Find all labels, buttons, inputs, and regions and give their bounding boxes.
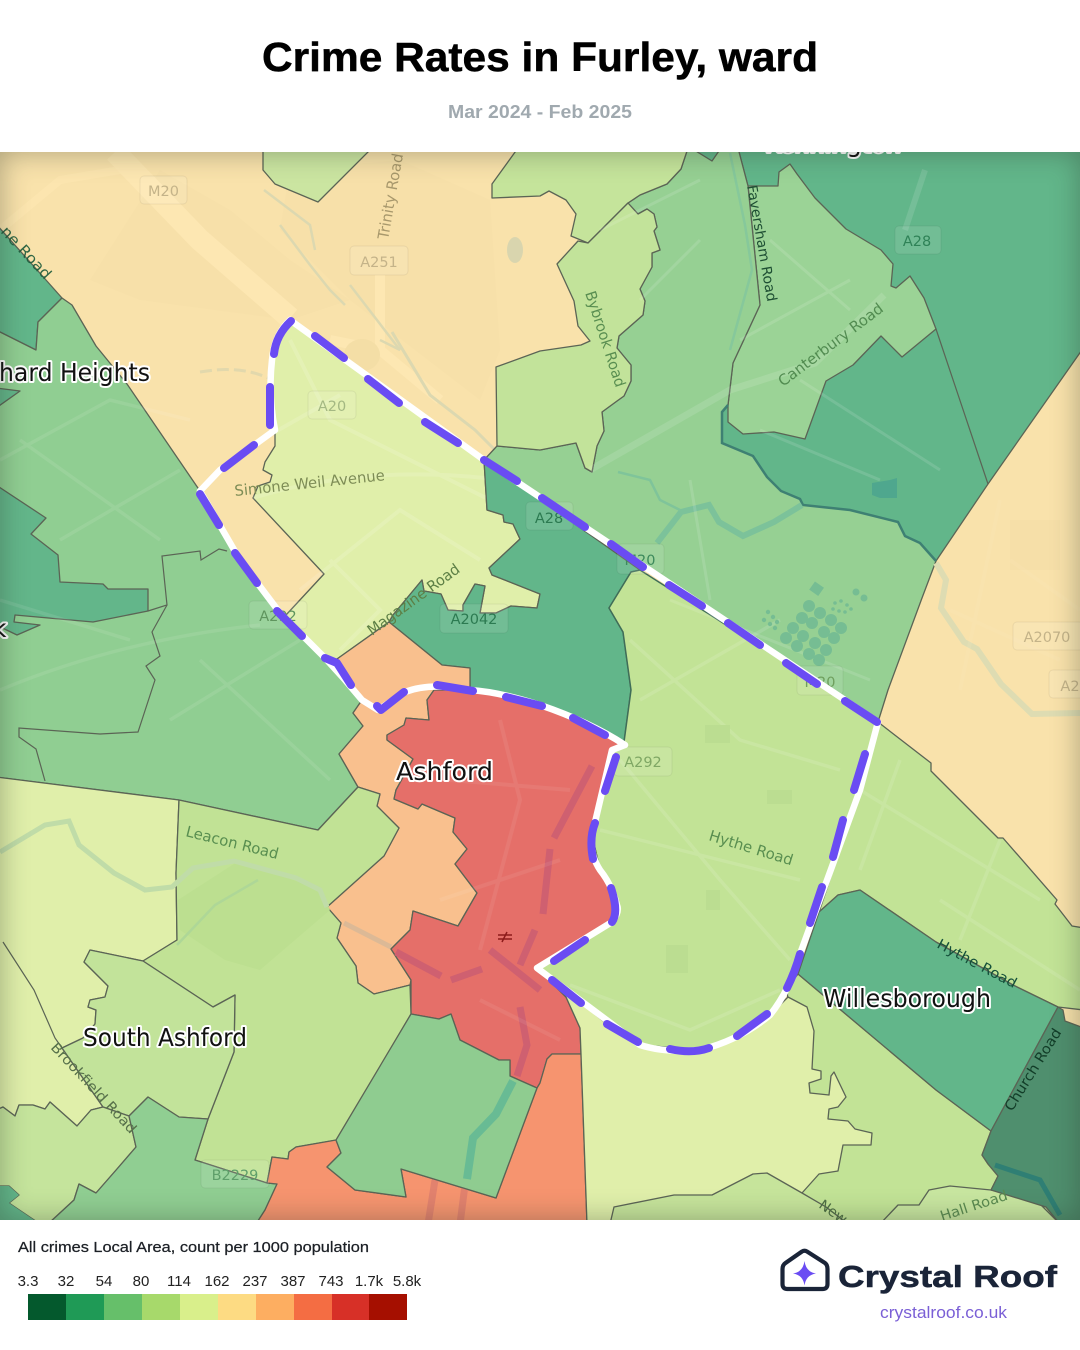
region: peach area	[327, 622, 477, 994]
legend scale values	[18, 1273, 422, 1290]
south-west boundary line	[3, 942, 62, 1048]
region: south-east light yellow	[537, 968, 872, 1224]
region: Leacon park darker patch	[326, 906, 330, 910]
place labels: South Ashford	[83, 1023, 247, 1052]
region: Bybrook lime	[496, 203, 660, 472]
road name labels: Hythe Road	[934, 936, 1019, 992]
road shield labels: B2229	[212, 1168, 258, 1184]
brand name: Crystal Roof	[838, 1259, 1058, 1294]
region: ward light yellow-green area	[253, 320, 540, 659]
region: south-east lime	[760, 974, 1060, 1224]
region: top right dark green	[722, 148, 1080, 561]
river in green south area	[467, 1081, 513, 1179]
region: green south of town	[327, 1014, 537, 1198]
region: bottom lime strip	[610, 1173, 848, 1224]
legend scale values: 32	[58, 1273, 74, 1290]
website: crystalroof.co.uk	[880, 1304, 1008, 1322]
region: town centre red	[387, 690, 625, 1088]
region: central north mid green	[484, 148, 936, 722]
legend scale values: 387	[280, 1273, 306, 1290]
road name labels: Leacon Road	[184, 822, 281, 863]
legend scale values: 237	[242, 1273, 268, 1290]
region: south-west light yellow	[0, 777, 179, 1126]
road shield labels: A2042	[451, 612, 497, 628]
region: east lime	[819, 722, 1080, 1010]
road shield labels: A292	[259, 609, 297, 625]
road shield labels: A251	[360, 255, 398, 271]
region: Leacon Road lime	[143, 787, 411, 1183]
road shields	[140, 176, 1080, 1188]
legend scale values: 80	[133, 1273, 149, 1290]
subtitle: date range: Mar 2024 - Feb 2025	[448, 101, 632, 122]
red area darker railway strips	[396, 766, 592, 1076]
road shield labels: M20	[625, 553, 655, 569]
rivers	[0, 153, 1080, 947]
region: bottom-left teal corner	[0, 1186, 34, 1220]
solar farm circles	[762, 581, 868, 666]
road name labels: Magazine Road	[364, 560, 463, 639]
east lime roads	[860, 760, 1080, 990]
road name labels: Brookfield Road	[47, 1040, 139, 1137]
region: west mid green	[0, 298, 363, 830]
base: tan area	[0, 152, 1080, 1026]
region: south-east dark green	[982, 1007, 1080, 1224]
legend	[18, 1239, 422, 1320]
road shield labels: M20	[148, 184, 179, 200]
road name labels: New	[816, 1197, 850, 1228]
region: top pocket lime	[263, 148, 372, 202]
place labels: Kennington	[765, 129, 901, 158]
road name labels: Hall Road	[938, 1188, 1010, 1225]
road name labels: Canterbury Road	[775, 299, 887, 390]
legend scale values: 3.3	[18, 1273, 38, 1290]
south-east river	[995, 1165, 1060, 1215]
tan area texture and motorway band	[200, 189, 523, 450]
pond	[872, 478, 897, 498]
icon: house logo	[782, 1251, 828, 1289]
road shield labels: A2070	[1024, 630, 1070, 646]
region: small west dark patch	[0, 388, 20, 408]
legend scale values: 743	[318, 1273, 344, 1290]
road name labels: Bybrook Road	[581, 289, 629, 389]
ward light-area roads	[253, 340, 490, 650]
place labels: Ashford	[396, 757, 493, 786]
road shield labels: A28	[903, 234, 931, 250]
boundary line in the dark green area	[936, 329, 988, 484]
region: west darker strip	[0, 485, 148, 635]
west internal boundaries	[19, 549, 227, 781]
road shield labels: A20	[318, 399, 346, 415]
road shield labels: A292	[624, 755, 662, 771]
region: top-left dark green	[0, 224, 62, 350]
ward boundary: white line	[200, 320, 878, 1051]
road name labels: Hythe Road	[707, 827, 795, 869]
map edge vignette	[0, 152, 1080, 1220]
region: bottom-right lime strip	[880, 1186, 1060, 1224]
main roads overlay	[590, 170, 1080, 690]
road name labels: Faversham Road	[743, 184, 779, 303]
brand block	[782, 1251, 1058, 1322]
region: top dark pocket	[696, 152, 719, 162]
region: B2229 mid green	[48, 1097, 277, 1224]
road shield labels: A28	[535, 511, 563, 527]
region: Hythe Road lime in the ward	[537, 570, 878, 1050]
ward roads and pitches	[570, 620, 840, 1030]
icon: railway station	[498, 932, 512, 942]
legend scale values: 5.8k	[393, 1273, 422, 1290]
place labels: Willesborough	[823, 984, 991, 1013]
darker stream edge along the south of the dark green area	[722, 405, 936, 561]
region: salmon south	[256, 1054, 587, 1224]
west road network	[0, 400, 330, 780]
legend scale values: 1.7k	[355, 1273, 384, 1290]
place labels	[0, 129, 991, 1052]
road shield labels	[148, 184, 1080, 1184]
legend scale values: 114	[167, 1273, 191, 1290]
region: lower-left lime	[0, 1102, 136, 1224]
road name labels: Simone Weil Avenue	[234, 466, 386, 500]
region: Willesborough green	[798, 890, 1058, 1131]
region: top lime	[492, 148, 688, 243]
region: Canterbury Road light green	[728, 164, 936, 439]
legend title: All crimes Local Area, count per 1000 population	[18, 1239, 369, 1256]
road name labels	[0, 152, 1065, 1228]
ward boundary: purple dashes	[200, 321, 877, 1051]
road name labels: Church Road	[1002, 1026, 1065, 1114]
region: South Ashford lime	[62, 950, 235, 1119]
place labels: hard Heights	[0, 358, 150, 387]
red area street grid	[440, 720, 570, 1040]
legend scale values: 54	[96, 1273, 112, 1290]
legend scale values: 162	[204, 1273, 230, 1290]
legend colour bar	[28, 1294, 407, 1320]
region: ward dark green centre	[389, 460, 640, 742]
title: Crime Rates in Furley, ward	[262, 34, 818, 80]
salmon strips	[428, 1180, 465, 1224]
road shield labels: M20	[805, 675, 835, 691]
road name labels: Trinity Road	[374, 152, 407, 242]
road shield labels: A2	[1060, 679, 1080, 695]
